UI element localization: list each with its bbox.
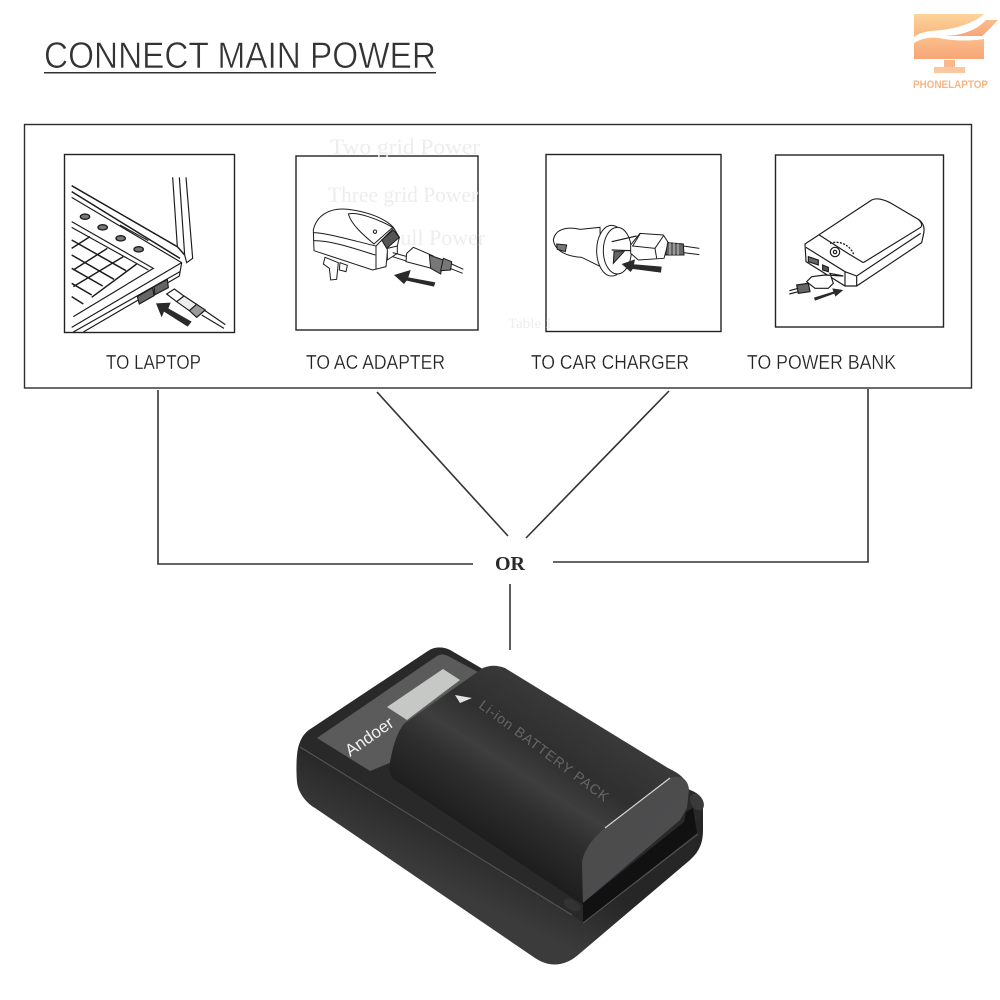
battery highlight <box>605 778 670 828</box>
panel: connection options <box>24 124 972 388</box>
faint show-through text: Full Power <box>388 225 486 250</box>
or label: OR <box>495 553 526 575</box>
label: TO POWER BANK <box>747 352 897 374</box>
faint show-through text: Two grid Power <box>330 134 481 159</box>
icon box: to power bank <box>776 155 944 327</box>
battery embossed label: Li-ion BATTERY PACK <box>476 697 613 805</box>
icon box: to laptop <box>64 154 234 332</box>
base front ridge <box>300 747 698 923</box>
battery pack body <box>389 666 689 905</box>
label: TO CAR CHARGER <box>531 352 689 374</box>
battery end face <box>582 777 689 903</box>
charger base front <box>296 647 703 964</box>
base top surface <box>300 647 703 923</box>
base corner bumps <box>687 791 707 813</box>
lcd window <box>387 669 460 720</box>
icon box: to AC adapter <box>296 134 486 330</box>
brand text: Andoer <box>341 713 398 760</box>
connector lines <box>158 389 868 650</box>
battery arrow <box>455 695 472 703</box>
title: CONNECT MAIN POWER <box>44 35 436 76</box>
faint show-through text <box>328 134 486 250</box>
display panel <box>317 654 478 771</box>
faint show-through text: Three grid Power <box>328 182 479 207</box>
logo: PhoneLaptop: PHONELAPTOP <box>913 79 988 91</box>
photo: battery charger with battery <box>296 647 707 964</box>
faint table note: Table 1 <box>508 316 552 332</box>
logo: PhoneLaptop <box>913 14 998 91</box>
charger slot <box>583 808 697 923</box>
icon box: to car charger <box>546 154 721 332</box>
label: TO LAPTOP <box>106 352 201 374</box>
label: TO AC ADAPTER <box>306 352 445 374</box>
